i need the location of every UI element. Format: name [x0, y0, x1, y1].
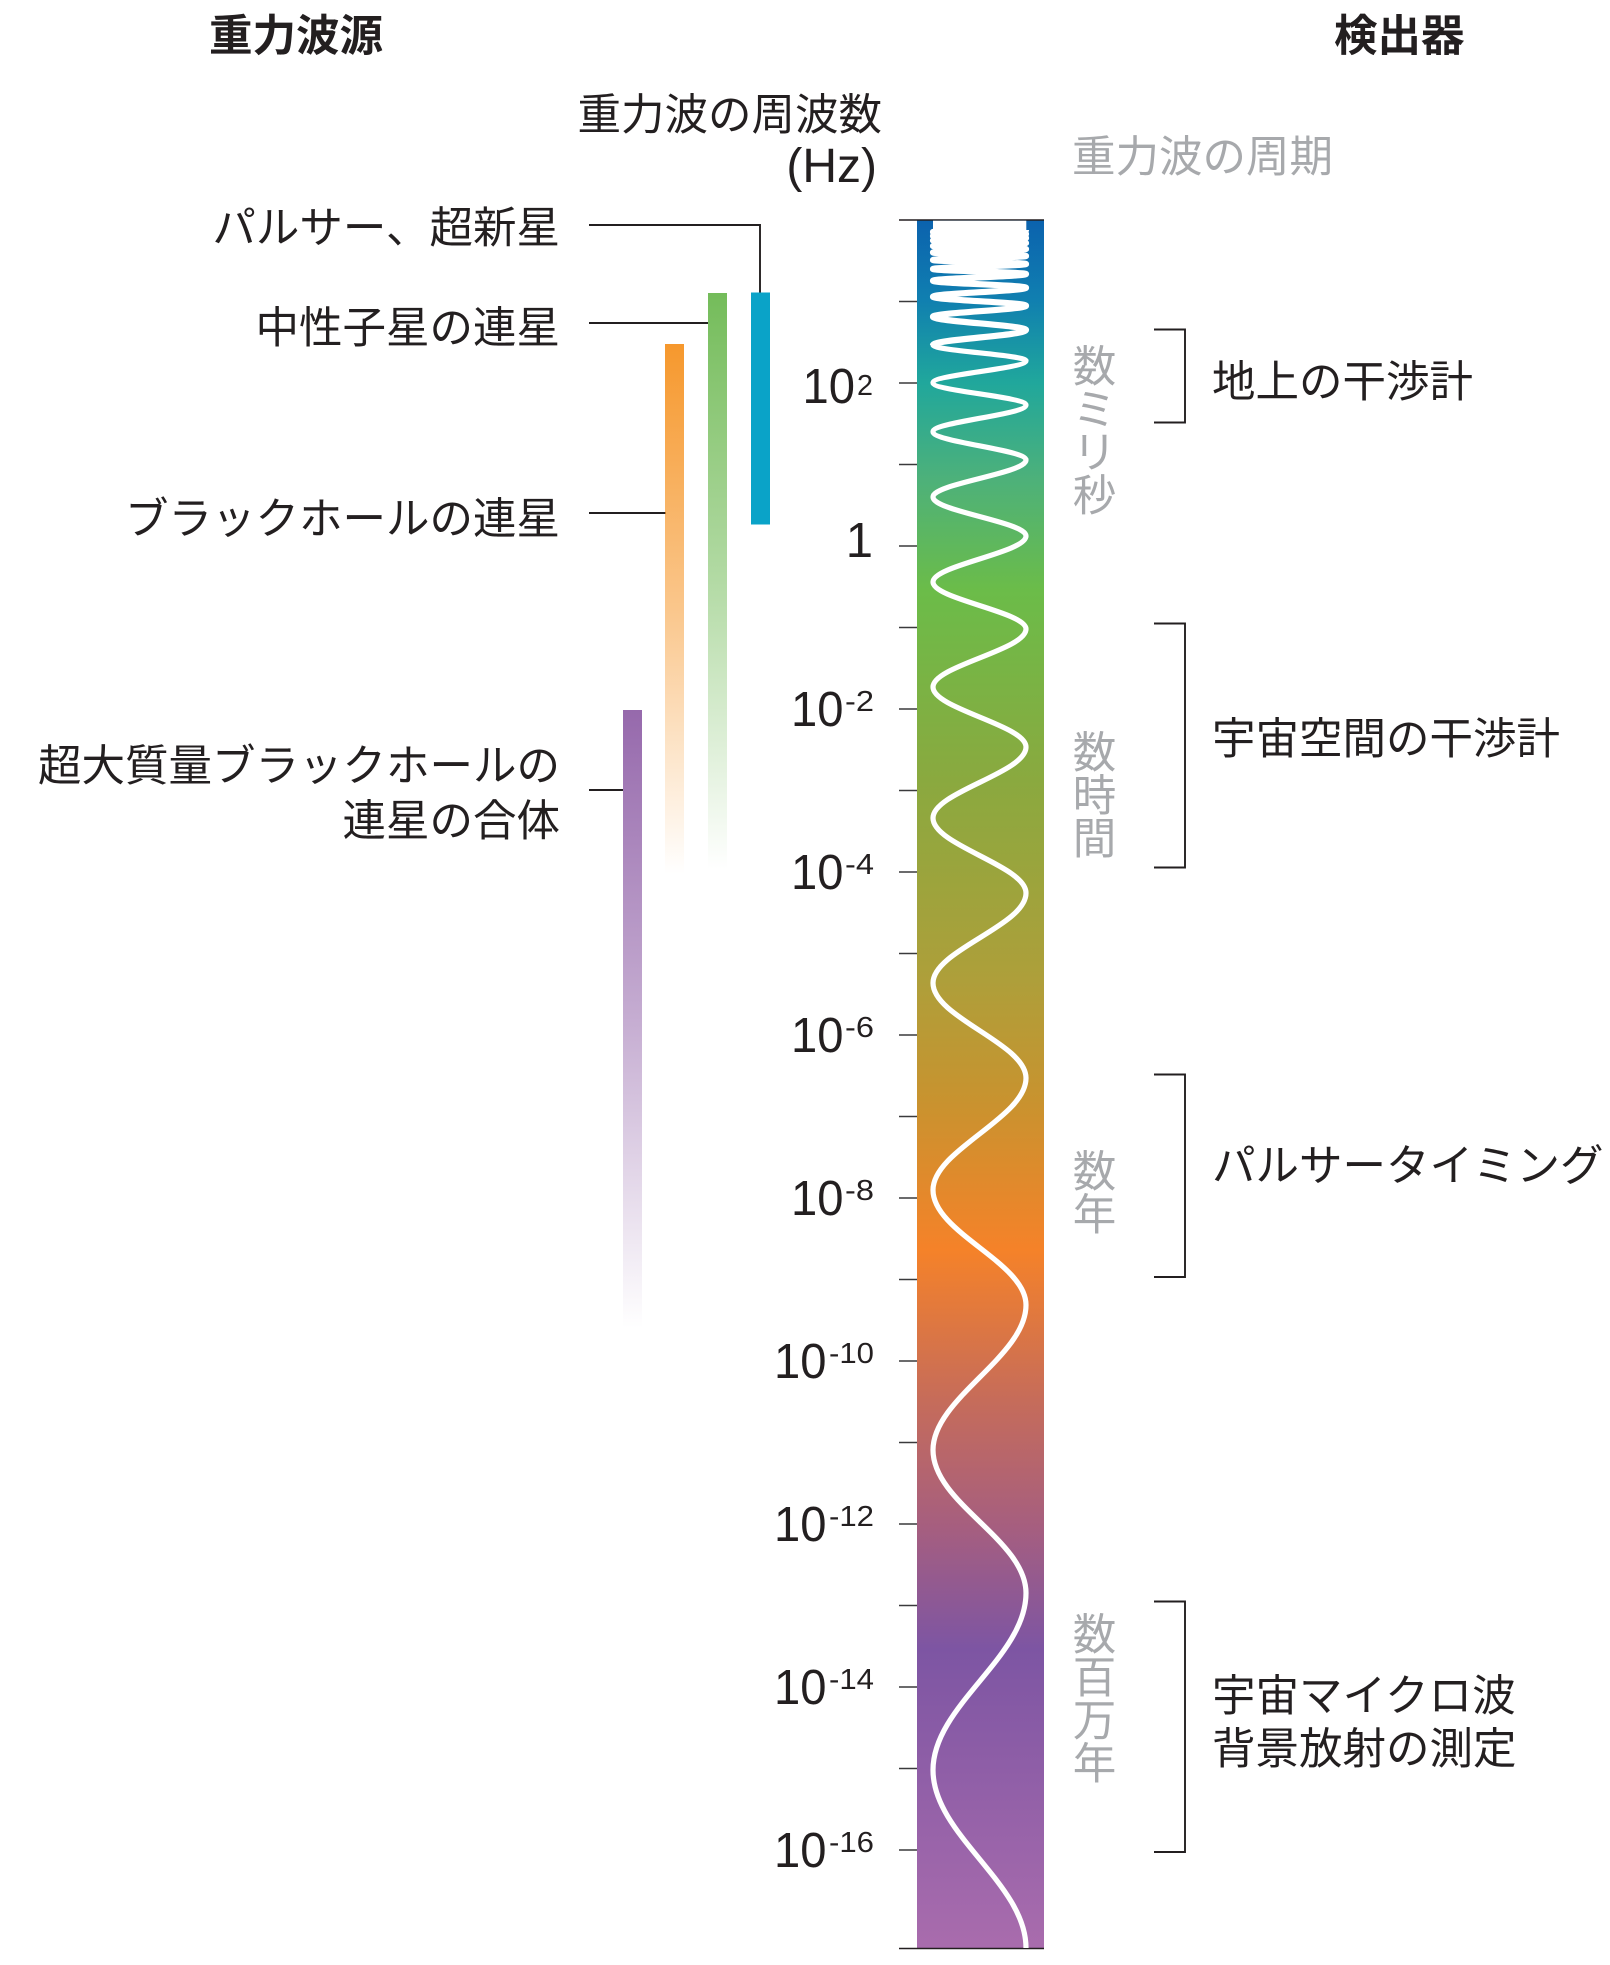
- heading: detectors: 検出器: [1334, 13, 1465, 61]
- detector: space interferometers: 宇宙空間の干渉計: [1212, 716, 1560, 764]
- source: supermassive black hole binary mergers: 超大質量ブラックホールの: [38, 743, 560, 791]
- frequency axis labels: -4: [845, 849, 874, 881]
- period label: years: 年: [1073, 1192, 1116, 1240]
- frequency axis labels: -2: [845, 686, 874, 718]
- frequency axis labels: -12: [829, 1501, 874, 1533]
- frequency axis labels: -16: [829, 1827, 874, 1859]
- frequency axis labels: 10: [774, 1661, 826, 1715]
- period label: millions of years: 年: [1073, 1741, 1116, 1789]
- period label: hours: 間: [1073, 816, 1116, 864]
- period label: millions of years: [1073, 1612, 1116, 1789]
- detector: cosmic microwave background measurement: 背景放射の測定: [1212, 1726, 1516, 1774]
- source: supermassive black hole binary mergers: 連星の合体: [342, 798, 560, 846]
- frequency axis labels: 10: [774, 1824, 826, 1878]
- source: pulsars and supernovae: パルサー、超新星: [212, 205, 560, 253]
- detector: pulsar timing: パルサータイミング: [1212, 1143, 1604, 1191]
- detector: space interferometers: [1154, 624, 1560, 868]
- frequency axis labels: 10: [791, 683, 844, 737]
- frequency axis labels: -8: [845, 1175, 874, 1207]
- frequency axis ticks: [899, 302, 917, 1850]
- period label: milliseconds: 数: [1073, 344, 1116, 392]
- frequency axis labels: 10: [774, 1498, 826, 1552]
- detector: ground-based interferometers: [1154, 330, 1473, 422]
- frequency axis labels: 10: [791, 1009, 844, 1063]
- frequency axis labels: 1: [846, 514, 873, 568]
- frequency axis labels: -6: [845, 1012, 874, 1044]
- period label: hours: [1073, 730, 1116, 864]
- period label: years: 数: [1073, 1149, 1116, 1197]
- frequency axis labels: 2: [857, 370, 873, 402]
- source: black hole binaries: [125, 344, 684, 874]
- axis title: gravitational wave frequency: (Hz): [786, 140, 877, 193]
- source: pulsars and supernovae: [212, 205, 770, 524]
- axis title: gravitational wave frequency: 重力波の周波数: [578, 92, 882, 140]
- frequency axis labels: -14: [829, 1664, 874, 1696]
- heading: gravitational wave sources: 重力波源: [209, 13, 383, 61]
- period label: hours: 数: [1073, 730, 1116, 778]
- period label: milliseconds: ミ: [1073, 387, 1116, 435]
- source: black hole binaries: ブラックホールの連星: [125, 496, 560, 544]
- period label: hours: 時: [1073, 773, 1116, 821]
- axis title: gravitational wave period: 重力波の周期: [1072, 134, 1333, 182]
- spectrum bar with rainbow gradient: [917, 220, 1044, 1948]
- frequency axis labels: 10: [791, 846, 844, 900]
- frequency axis labels: 10: [774, 1335, 826, 1389]
- source: neutron star binaries: [256, 293, 727, 869]
- period label: millions of years: 万: [1073, 1698, 1116, 1746]
- detector: cosmic microwave background measurement: 宇宙マイクロ波: [1212, 1673, 1516, 1721]
- frequency axis labels: [774, 360, 874, 1878]
- frequency axis labels: 10: [791, 1172, 844, 1226]
- detector: ground-based interferometers: 地上の干渉計: [1212, 359, 1473, 407]
- frequency axis labels: -10: [829, 1338, 874, 1370]
- frequency axis labels: 10: [802, 360, 855, 414]
- period label: milliseconds: 秒: [1073, 473, 1116, 521]
- period label: millions of years: 百: [1073, 1655, 1116, 1703]
- source: neutron star binaries: 中性子星の連星: [256, 305, 560, 353]
- source: supermassive black hole binary mergers: [38, 710, 642, 1328]
- top and bottom axis lines: [899, 220, 1044, 1948]
- period label: years: [1073, 1149, 1116, 1240]
- detector: cosmic microwave background measurement: [1154, 1602, 1516, 1852]
- detector: pulsar timing: [1154, 1074, 1604, 1277]
- axis title: gravitational wave frequency: [578, 92, 882, 193]
- white chirped wave: [933, 221, 1026, 1948]
- period label: millions of years: 数: [1073, 1612, 1116, 1660]
- period label: milliseconds: リ: [1073, 430, 1116, 478]
- period label: milliseconds: [1073, 344, 1116, 521]
